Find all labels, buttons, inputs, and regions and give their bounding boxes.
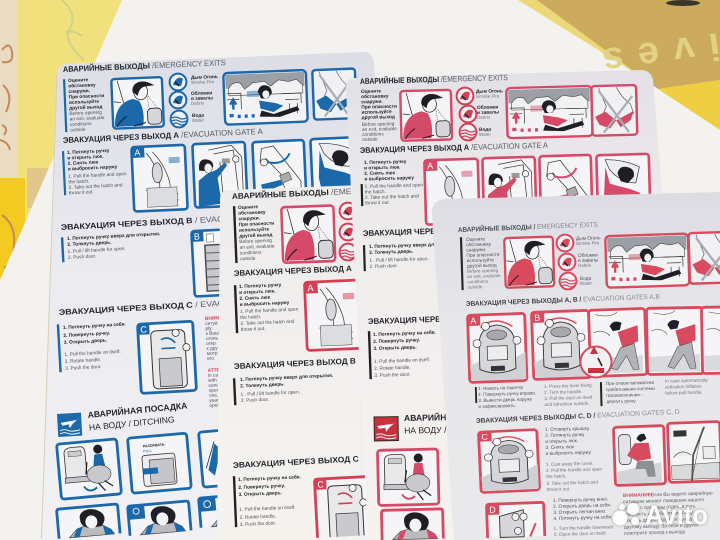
red card hazard icons: Water: [479, 132, 492, 137]
icon: ditching plane: [57, 413, 82, 437]
blue card assessment note: другой выход: [69, 103, 103, 111]
foreground hazard icons: Дым Огонь: [576, 235, 601, 242]
panel: crossed out slide: [312, 69, 357, 120]
red card gate C instructions: 2. Повернуть ручку.: [373, 337, 420, 345]
blue card assessment note: Оцените: [68, 77, 89, 84]
small card assessment note: другой выход: [239, 231, 272, 239]
gate C warning text: мотр: [207, 351, 218, 357]
inflation failure note: газонаполнения -: [606, 392, 643, 398]
panel: ditching third step: [199, 427, 262, 487]
panel: ditching inflate with light tag: [127, 501, 191, 536]
gate C instructions: 1. Потянуть ручку на себя.: [63, 320, 126, 331]
panel: small card gate C door: C: [317, 479, 325, 490]
panel: gate D mechanism: [486, 502, 545, 538]
gates A B english steps: and introduce outside.: [544, 401, 590, 407]
heading: red card ditching: АВАРИЙНАЯ ПОСАДКА: [404, 410, 504, 423]
panel: gate A mechanism: [467, 313, 527, 383]
gate C steps: 1. Cast away the cover.: [546, 461, 594, 467]
small card gate C instructions: 2. Rotate handle.: [239, 513, 276, 521]
red card gate B instructions: 1. Потянуть ручку вверх для открытия.: [369, 241, 462, 250]
small card gate A instructions: 2. Take out the hatch and: [240, 319, 295, 327]
foreground assessment note: an exit, evaluate: [467, 273, 501, 279]
foreground assessment note: снаружи.: [466, 248, 486, 254]
small card assessment note: Before opening: [239, 238, 272, 245]
heading: red card gate B: ЭВАКУАЦИЯ ЧЕРЕЗ ВЫХОД В: [363, 225, 481, 238]
small card gate A instructions: [234, 282, 300, 333]
foreground assessment note: другой выход: [467, 262, 497, 269]
panel: red card crossed slide: [591, 85, 637, 136]
foreground assessment note: outside: [467, 284, 483, 290]
blue card assessment note: Before opening: [69, 110, 102, 117]
heading: small card gate C: ЭВАКУАЦИЯ ЧЕРЕЗ ВЫХОД С: [233, 454, 359, 470]
red card gate A instructions: [360, 158, 424, 207]
warning paragraph: ситуацию меняет поведение вашего: [623, 498, 705, 505]
gate A instructions: the hatch.: [68, 178, 90, 185]
gate D steps: [553, 496, 614, 537]
gate C steps: the hatch.: [546, 473, 567, 479]
warning paragraph: открыть дверь наружу и выход: [624, 517, 692, 524]
gate C steps: 3. Take out the hatch and: [546, 480, 598, 486]
gate C steps: throw it out.: [547, 486, 570, 492]
warning paragraph: другому выходу. За себя и других: [624, 522, 699, 530]
panel: gate A door: [131, 145, 188, 212]
panel: seated at exit: [613, 426, 666, 486]
foreground hazard icons: Обломки: [578, 252, 598, 259]
gate C warning text: ситуа: [205, 321, 218, 327]
small card gate B instructions: 2. Push door.: [241, 397, 269, 404]
red card hazard icons: Обломки: [477, 103, 498, 111]
gate A instructions: и выбросить наружу: [68, 163, 118, 172]
foreground assessment note: conditions: [467, 279, 489, 284]
red card assessment note: Before opening: [362, 121, 395, 128]
foreground assessment note: Оцените: [466, 236, 486, 243]
red card assessment note: outside: [362, 137, 378, 143]
foreground hazard icons: Debris: [578, 263, 592, 268]
blue card assessment note: conditions: [70, 121, 92, 128]
red card gate A instructions: и открыть люк.: [364, 165, 401, 171]
callout: inflate handle: [580, 346, 612, 378]
small card assessment note: outside: [240, 256, 256, 262]
panel: red card gate A door: [424, 158, 480, 225]
panel: gate D mechanism: D: [489, 505, 496, 515]
red card hazard icons: Дым Огонь: [476, 88, 503, 95]
red card assessment note: снаружи.: [361, 100, 383, 105]
gates A B english steps: [544, 383, 594, 407]
red card assessment note: При опасности: [361, 104, 397, 111]
panel: open the hatch: [192, 142, 248, 208]
panel: ditching pull vest: РАЗОРВАТЬ: [143, 443, 165, 449]
gate C warning text: oper: [209, 402, 220, 409]
hazard icons: Вода: [192, 113, 204, 119]
gate D steps: 2. Открыть дверь на себя.: [553, 502, 611, 510]
panel: foreground check window: [504, 237, 554, 288]
small card assessment note: При опасности: [239, 221, 274, 228]
foreground assessment note: Before opening: [467, 268, 499, 274]
red card gate A instructions: throw it out.: [365, 200, 390, 206]
warning paragraph: опасность и сообщите экипажу: [623, 510, 694, 518]
panel: gate A mechanism: A: [470, 316, 476, 326]
red card gate A instructions: the hatch.: [365, 189, 386, 195]
blue card assessment note: an exit, evaluate: [70, 115, 105, 122]
gate A instructions: и открыть люк.: [67, 155, 104, 161]
warning paragraph: ВНИМАНИЕ!: [623, 492, 653, 499]
inflation failure note: activation inflation: [665, 384, 702, 390]
foreground assessment note: При опасности: [466, 252, 500, 259]
gate C warning text: откр: [206, 341, 216, 347]
hazard icons: [170, 74, 218, 127]
small card gate C instructions: 3. Открыть дверь.: [238, 490, 282, 498]
gates A B english steps: 2. Turn the handle.: [544, 389, 582, 395]
panel: gate C door: [137, 321, 196, 393]
warning paragraph: Если Вы видите аварийную: [651, 489, 713, 498]
red card gate B instructions: 1 . Pull / lift handle for open.: [369, 256, 429, 264]
gate C warning text: его: [207, 357, 215, 362]
foreground hazard icons: Smoke Fire: [576, 240, 600, 246]
gate C warning text: ATTE: [208, 367, 221, 374]
gate C steps: [545, 425, 603, 492]
gate C warning text: one.: [209, 393, 218, 399]
gate C warning text: к Ваш: [206, 330, 219, 337]
panel: foreground crossed slide: [688, 232, 720, 284]
panel: gate B door: B: [194, 231, 200, 242]
small card gate C instructions: 3. Push the door.: [240, 520, 276, 528]
foreground assessment note: используйте: [467, 256, 495, 264]
red card hazard icons: [457, 88, 503, 140]
heading: red card gate A: ЭВАКУАЦИЯ ЧЕРЕЗ ВЫХОД А /EVACUATION GATE A: [360, 141, 549, 155]
red card gate C instructions: 3. Push the door.: [374, 372, 411, 379]
small card gate A instructions: throw it out.: [241, 326, 266, 333]
gates A B russian steps: 2. Повернуть ручку вправо.: [478, 390, 536, 397]
foreground assessment note: обстановку: [466, 241, 492, 248]
foreground hazard icons: Water: [580, 281, 593, 286]
hazard icons: и завалы: [191, 96, 213, 102]
red card assessment note: Оцените: [361, 88, 382, 95]
hazard icons: Обломки: [191, 89, 212, 97]
red card hazard icons: и завалы: [477, 110, 499, 116]
panel: red card throw hatch: [596, 154, 650, 218]
red card title: АВАРИЙНЫЕ ВЫХОДЫ /EMERGENCY EXITS: [360, 73, 508, 86]
panel: jump out: [646, 307, 704, 375]
blue card assessment note: outside: [70, 127, 86, 133]
red card hazard icons: Smoke Fire: [476, 93, 500, 99]
red card gate B instructions: 2. Толкнуть дверь.: [369, 249, 414, 256]
foreground hazard icons: [557, 235, 601, 289]
gate A instructions: 2. Снять люк: [67, 159, 99, 167]
red card gate C instructions: 1. Потянуть ручку на себя.: [373, 329, 436, 338]
blue card assessment note: обстановку: [68, 81, 96, 89]
warning paragraph: [623, 489, 714, 537]
inflation failure note: При отказе автоматики: [606, 380, 655, 386]
red card gate B instructions: 2. Push door.: [370, 263, 398, 270]
panel: lift the hatch: [252, 140, 307, 205]
panel: walk to door: [588, 308, 647, 377]
gate C instructions: 2. Повернуть ручку.: [63, 330, 110, 339]
gate B instructions: 1. Pull / lift handle for open.: [67, 246, 126, 255]
panel: foreground cabin scene: [605, 234, 689, 288]
panel: gate B mechanism: B: [534, 313, 540, 323]
panel: ditching pull vest: PULL: [143, 449, 152, 454]
heading: ditching: НА ВОДУ / DITCHING: [88, 414, 175, 432]
gate A instructions: 2. Take out the hatch and: [69, 182, 123, 191]
red card assessment note: другой выход: [362, 113, 395, 121]
gate C warning text: [205, 315, 224, 409]
panel: gate C mechanism: [478, 429, 540, 493]
gate D steps: 2. Open the door on itself.: [554, 531, 607, 537]
gates A B english steps: 3. Pull the door on itself: [544, 395, 593, 401]
inflation failure note: дернуть ручку: [606, 398, 637, 404]
small card gate C instructions: 1. Pull the handle on itself.: [239, 505, 296, 513]
gate A instructions: 1. Потянуть ручку: [67, 148, 110, 156]
red card gate A instructions: 1. Потянуть ручку: [364, 159, 407, 166]
icon: red ditching plane: [374, 417, 398, 441]
small card gate C instructions: [233, 473, 303, 528]
heading: small card gate B: ЭВАКУАЦИЯ ЧЕРЕЗ ВЫХОД В: [234, 356, 356, 371]
red card gate A instructions: 2. Снять люк: [364, 170, 396, 177]
panel: gate C door: C: [140, 324, 148, 335]
gate B instructions: 2. Толкнуть дверь.: [67, 240, 112, 248]
small card gate B instructions: 2. Толкнуть дверь.: [240, 381, 285, 389]
gates A B russian steps: 1. Нажать на гашетку: [478, 385, 524, 391]
gate C warning text: огонь: [206, 336, 219, 342]
small card assessment note: an exit, evaluate: [240, 243, 275, 251]
gate A instructions: [62, 147, 128, 197]
red card hazard icons: Debris: [477, 115, 491, 120]
gate B instructions: 2. Push door.: [68, 253, 96, 261]
heading: red card gate C: ЭВАКУАЦИЯ ЧЕРЕЗ ВЫХОД С: [368, 313, 486, 326]
gate C instructions: 1. Pull the handle on itself.: [64, 349, 121, 358]
panel: throw hatch out: [310, 137, 366, 202]
inflation failure note: срабатывания системы: [606, 386, 655, 392]
gate C warning text: sure: [208, 382, 218, 389]
gate C steps: и выбросить наружу: [546, 450, 592, 457]
red card gate A instructions: 1. Pull the handle and open: [365, 182, 423, 190]
small card gate A instructions: the hatch.: [240, 314, 261, 321]
gate C warning text: with: [208, 377, 217, 384]
blue card assessment note: [63, 77, 106, 134]
small card gate B instructions: 1. Потянуть ручку вверх для открытия.: [240, 373, 333, 383]
red card gate A instructions: 2. Take out the hatch and: [365, 193, 419, 201]
small card gate A instructions: 1. Pull the handle and open: [240, 307, 299, 315]
red card assessment note: conditions: [362, 131, 384, 138]
blue card assessment note: используйте: [69, 98, 100, 106]
gate C steps: 2. Потянуть ручку: [545, 432, 585, 439]
warning paragraph: соседа с преграды отделяя путь: [623, 505, 696, 512]
panel: red card gate A door: A: [427, 161, 433, 171]
gate C instructions: [57, 320, 128, 372]
small card gate A instructions: 2. Снять люк: [239, 295, 271, 302]
gates A B russian steps: и зафиксировать.: [478, 403, 516, 409]
red card assessment note: используйте: [361, 108, 392, 116]
gate A instructions: throw it out.: [69, 189, 94, 196]
panel: ditching whistle with tag: [198, 493, 262, 528]
gates A B russian steps: [475, 384, 537, 409]
small card assessment note: Оцените: [238, 204, 259, 211]
inflation failure note: [600, 377, 709, 406]
card: small red card: [217, 185, 373, 540]
gate D steps: 1. Turn the handle downward.: [554, 524, 614, 531]
heading: gates A and B: ЭВАКУАЦИЯ ЧЕРЕЗ ВЫХОДЫ А, В / EVACUATION GATES A,B: [466, 294, 660, 308]
panel: gate B door: [191, 228, 250, 297]
gate C instructions: 2. Rotate handle.: [65, 357, 101, 365]
panel: next step: [701, 306, 720, 374]
red card hazard icons: Вода: [479, 127, 491, 133]
gate C steps: 3. Снять люк: [545, 444, 575, 451]
gate D steps: 3. Открыть легчан вниз.: [553, 509, 607, 516]
gate C warning text: oper: [209, 387, 219, 394]
inflation failure note: In case automatically: [665, 377, 709, 384]
panel: ditching vest on: [57, 504, 120, 539]
heading: ditching: АВАРИЙНАЯ ПОСАДКА: [87, 399, 188, 420]
heading: red card ditching: [404, 410, 504, 435]
gate C instructions: 3. Push the door.: [65, 364, 102, 372]
heading: evacuation gate B: ЭВАКУАЦИЯ ЧЕРЕЗ ВЫХОД В / EVACUA: [61, 214, 237, 232]
small card gate C instructions: 1. Потянуть ручку на себя.: [238, 473, 301, 483]
hazard icons: Water: [192, 118, 205, 123]
foreground assessment note: [460, 236, 501, 290]
warning paragraph: осмотрите проход к выходу: [624, 530, 686, 537]
blue card assessment note: При опасности: [69, 93, 104, 100]
red card gate C instructions: [368, 329, 437, 379]
panel: small card check window: [281, 205, 335, 263]
panel: small card gate A door: [304, 280, 362, 351]
gate C steps: 2. Pull the handle and open: [546, 466, 603, 473]
gate C warning text: ply.: [205, 326, 213, 332]
heading: ditching: [87, 399, 189, 432]
heading: red card ditching: НА ВОДУ / DITCHING: [404, 424, 491, 435]
panel: gate B mechanism: [531, 310, 591, 380]
gates A B russian steps: 3. Вывести дверь наружу: [478, 396, 533, 403]
gates A B english steps: 1. Press the lever fixing.: [544, 383, 593, 389]
gate C instructions: 3. Открыть дверь.: [64, 338, 107, 346]
watermark: Avito logo: Avito: [645, 500, 708, 530]
watermark: Avito logo: [612, 500, 708, 530]
small card assessment note: [233, 204, 276, 263]
blue card assessment note: снаружи.: [68, 89, 90, 95]
heading: gates C and D: ЭВАКУАЦИЯ ЧЕРЕЗ ВЫХОДЫ С, D / EVACUATION GATES C, D: [476, 409, 680, 425]
gate C warning text: yeari: [209, 397, 220, 404]
small card assessment note: conditions: [240, 250, 262, 257]
small card gate C instructions: 2. Повернуть ручку.: [238, 483, 285, 491]
red card assessment note: [361, 88, 398, 143]
hazard icons: Debris: [191, 101, 205, 106]
red card gate C instructions: 1. Pull the handle on itself.: [374, 357, 430, 365]
panel: gate C mechanism: C: [481, 432, 488, 442]
gate C warning text: ВНИМ: [205, 315, 219, 322]
card: foreground red card: [432, 192, 720, 540]
card: large red card: [346, 70, 690, 540]
panel: small card gate C door: [314, 476, 373, 538]
small card gate B instructions: 1 . Pull / lift handle for open.: [240, 389, 300, 398]
red card assessment note: обстановку: [361, 92, 389, 100]
gate A instructions: 1. Pull the handle and open: [68, 171, 127, 180]
blue card title: АВАРИЙНЫЕ ВЫХОДЫ /EMERGENCY EXITS: [63, 58, 226, 74]
panel: ditching pull vest: [128, 433, 191, 493]
panel: ditching brace: [57, 439, 121, 499]
panel: red card brace: [377, 449, 439, 506]
red card gate B instructions: [363, 241, 463, 271]
panel: red card check window: [400, 90, 452, 141]
panel: exit sign aisle: [667, 422, 720, 483]
gate C warning text: in ca: [208, 372, 219, 379]
panel: gate A door: A: [134, 148, 141, 158]
small card assessment note: используйте: [239, 226, 270, 234]
panel: check outside window: [111, 77, 164, 129]
heading: small card gate A: ЭВАКУАЦИЯ ЧЕРЕЗ ВЫХОД А: [234, 264, 352, 278]
panel: red card cabin scene: [506, 86, 593, 138]
gate C steps: 1. Отовярть крышку.: [545, 426, 590, 433]
hazard icons: Дым Огонь: [191, 74, 218, 81]
gate B instructions: 1. Потянуть ручку вверх для открытия.: [67, 231, 160, 242]
panel: red card vest: [381, 509, 443, 540]
small card assessment note: обстановку: [238, 209, 266, 217]
small card gate A instructions: 1. Потянуть ручку: [239, 282, 282, 290]
small card gate A instructions: и выбросить наружу: [240, 299, 290, 308]
mirrored wall lettering: ives: [600, 24, 720, 82]
red card gate A instructions: и выбросить наружу: [364, 174, 414, 182]
hazard icons: Smoke Fire: [191, 79, 215, 85]
panel: small card gate A door: A: [307, 282, 315, 293]
small card title: АВАРИЙНЫЕ ВЫХОДЫ /EMERG: [232, 186, 364, 201]
panel: red card lift hatch: [539, 155, 592, 219]
red card assessment note: an exit, evaluate: [362, 126, 397, 133]
card: blue emergency exits card: [41, 52, 392, 540]
panel: red card open hatch: [482, 157, 536, 222]
heading: evacuation gate A: ЭВАКУАЦИЯ ЧЕРЕЗ ВЫХОД А /EVACUATION GATE A: [63, 127, 264, 145]
red card gate C instructions: 2. Rotate handle.: [374, 365, 411, 372]
panel: cabin smoke scene: [223, 70, 308, 125]
gate C warning text: к дру: [206, 346, 219, 352]
inflation failure note: failure pull handle.: [665, 390, 703, 396]
small card assessment note: снаружи.: [238, 216, 260, 222]
gate D steps: 1. Повернуть ручку вниз.: [553, 496, 608, 504]
gate B instructions: [61, 231, 161, 262]
foreground hazard icons: и завалы: [578, 258, 599, 264]
red card gate C instructions: 3. Открыть дверь.: [373, 344, 417, 352]
heading: evacuation gate C: ЭВАКУАЦИЯ ЧЕРЕЗ ВЫХОД С / EVACU: [59, 298, 231, 317]
small card gate A instructions: и открыть люк.: [239, 289, 276, 296]
small card gate B instructions: [233, 373, 334, 405]
foreground card title: АВАРИЙНЫЕ ВЫХОДЫ / EMERGENCY EXITS: [458, 220, 598, 234]
foreground hazard icons: Вода: [580, 276, 592, 282]
small card hazard icons: [340, 203, 356, 260]
gate C steps: и открыть люк.: [545, 439, 578, 445]
gate D steps: 4. Потянуть ручку на себя.: [553, 514, 612, 522]
